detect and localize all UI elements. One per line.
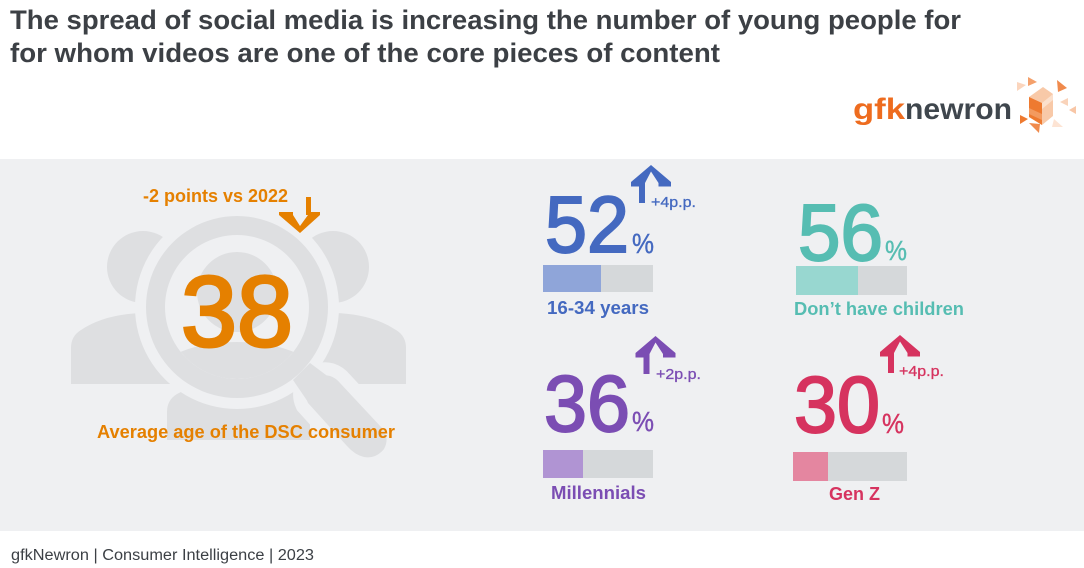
arrow: up pink <box>880 335 920 373</box>
stat: 16-34 years: +4p.p. <box>651 194 696 211</box>
stat: gen z <box>793 335 944 504</box>
stat: 16-34 years: % <box>632 228 654 259</box>
title <box>10 5 961 68</box>
change: -2 points vs 2022: -2 points vs 2022 <box>143 185 288 206</box>
logo: gfknewron: newron <box>905 93 1012 126</box>
arrow: up blue <box>631 165 671 203</box>
arrow: down orange <box>279 197 320 233</box>
stat: gen z: % <box>882 408 904 439</box>
arrow: up purple <box>636 336 676 374</box>
stat: gen z: 30 <box>794 360 880 449</box>
stat: millennials: Millennials <box>551 483 646 503</box>
stat: don't have children: % <box>885 235 907 266</box>
footer: gfkNewron | Consumer Intelligence | 2023 <box>11 547 314 564</box>
background panel <box>0 159 1084 531</box>
label: average age: Average age of the DSC consumer <box>97 421 395 442</box>
stat: gen z: +4p.p. <box>899 363 944 380</box>
stat: 16-34 years: 52 <box>545 180 629 269</box>
stat: don't have children: Don’t have children <box>794 299 964 319</box>
title: for whom videos are one of the core pieces of content <box>10 38 720 68</box>
stat: millennials: 36 <box>544 359 630 448</box>
logo: gfknewron: gfk <box>853 93 905 126</box>
title: The spread of social media is increasing the number of young people for <box>10 5 961 35</box>
stat: don't have children: 56 <box>798 188 883 277</box>
stat: gen z: Gen Z <box>829 484 880 504</box>
value: 38: 38 <box>181 256 293 368</box>
stat: millennials: +2p.p. <box>656 366 701 383</box>
icon: people under magnifying glass <box>71 216 406 457</box>
stat: 16-34 years: 16-34 years <box>547 298 649 318</box>
stat: 16-34 years <box>543 165 696 318</box>
stat: millennials <box>543 336 701 503</box>
stat: don't have children <box>794 188 964 319</box>
logo: gfknewron <box>853 77 1076 133</box>
stat: millennials: % <box>632 406 654 437</box>
